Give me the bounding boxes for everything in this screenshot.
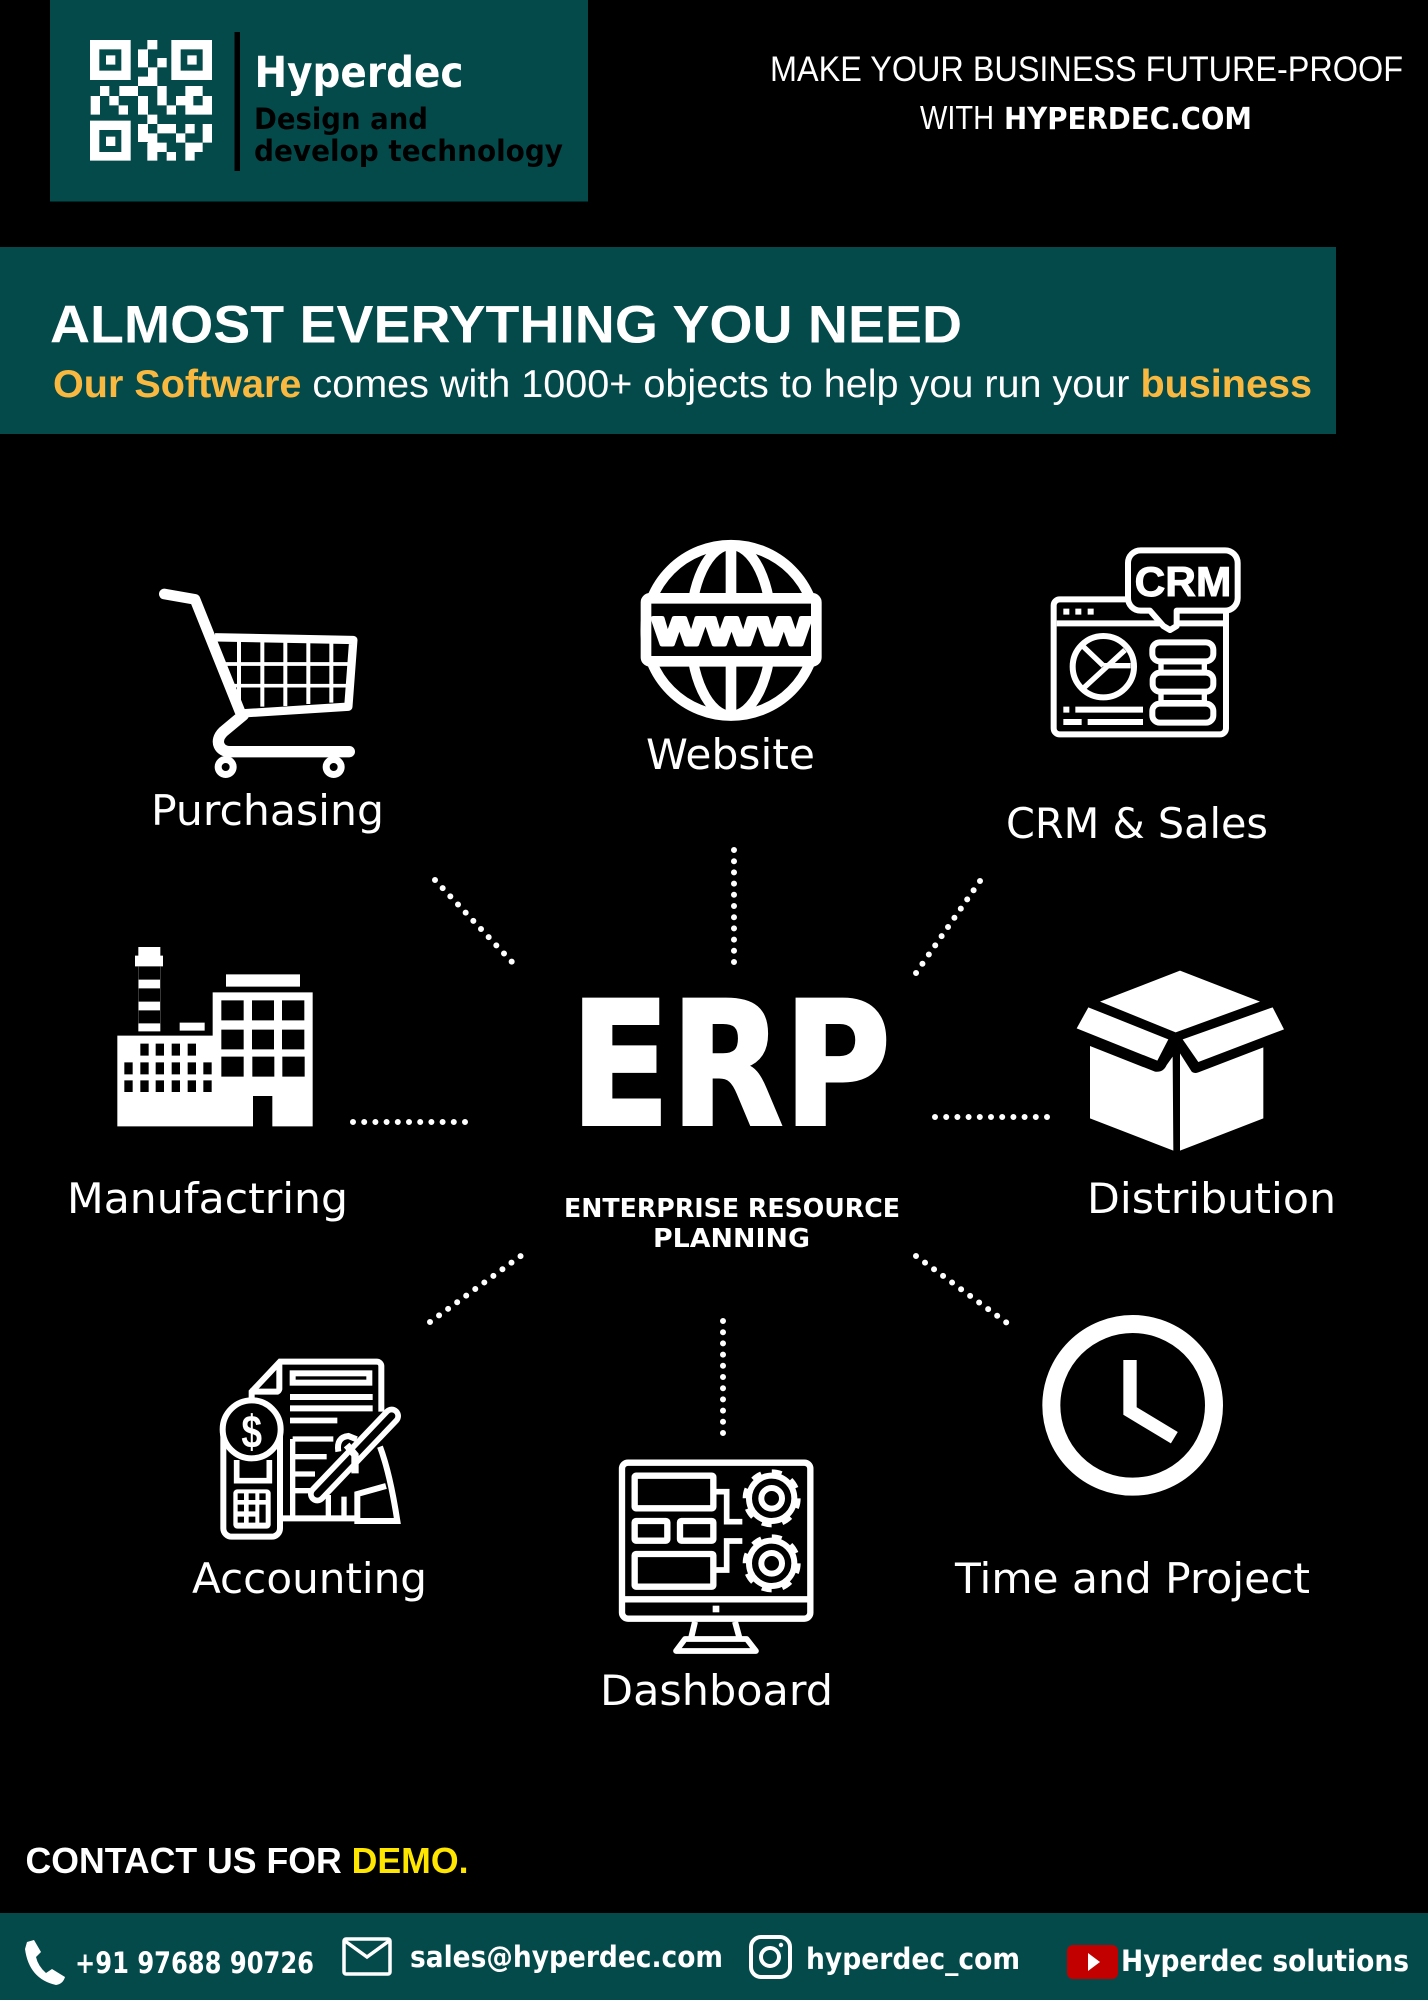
icon: website globe: www	[652, 599, 810, 655]
icon: mail	[344, 1939, 390, 1974]
dotted connectors	[353, 850, 1049, 1434]
banner subheading: Our Software comes with 1000+ objects to help you run your business	[53, 363, 1312, 406]
logo tagline: develop technology	[254, 134, 563, 168]
icon: shopping cart	[164, 594, 353, 774]
center: ERP subtitle: ENTERPRISE RESOURCE	[564, 1194, 900, 1224]
header tagline: WITH	[920, 99, 994, 136]
contact: email: sales@hyperdec.com	[410, 1940, 723, 1974]
label: Manufactring: Manufactring	[67, 1174, 348, 1223]
icon: QR code	[90, 40, 212, 161]
label: Dashboard: Dashboard	[600, 1666, 833, 1715]
icon: website globe	[646, 542, 816, 720]
header tagline	[770, 50, 1403, 137]
panel: footer	[0, 1913, 1428, 2000]
header tagline: HYPERDEC.COM	[1004, 102, 1252, 137]
icon: phone	[25, 1940, 65, 1985]
label: Accounting: Accounting	[192, 1554, 427, 1603]
contact: instagram handle: hyperdec_com	[806, 1942, 1020, 1976]
icon: CRM window	[1054, 550, 1238, 734]
logo tagline: Design and	[254, 102, 428, 136]
center: ERP subtitle: PLANNING	[653, 1224, 810, 1254]
contact heading: CONTACT US FOR DEMO.	[26, 1840, 468, 1881]
panel: logo	[50, 0, 588, 202]
icon: accounting	[223, 1362, 397, 1537]
center: ERP heading: ERP	[570, 964, 891, 1166]
contact: phone number: +91 97688 90726	[75, 1946, 314, 1980]
panel: banner	[0, 247, 1336, 434]
icon: instagram	[751, 1937, 790, 1977]
icon: accounting: $	[241, 1405, 262, 1457]
icon: youtube	[1067, 1945, 1118, 1979]
logo tagline	[254, 102, 563, 168]
icon: dashboard monitor	[622, 1463, 810, 1651]
contact: youtube channel: Hyperdec solutions	[1121, 1944, 1409, 1978]
icon: CRM window: CRM	[1135, 558, 1231, 605]
label: Distribution: Distribution	[1087, 1174, 1336, 1223]
center: ERP subtitle	[564, 1194, 900, 1254]
label: Purchasing: Purchasing	[151, 786, 384, 835]
label: CRM and Sales: CRM & Sales	[1006, 799, 1268, 848]
label: Time and Project: Time and Project	[954, 1554, 1310, 1603]
banner heading: ALMOST EVERYTHING YOU NEED	[50, 296, 962, 354]
icon: clock	[1051, 1324, 1214, 1487]
icon: factory	[117, 947, 313, 1126]
logo name: Hyperdec	[254, 48, 464, 98]
icon: open box	[1077, 971, 1284, 1151]
label: Website: Website	[646, 730, 815, 779]
